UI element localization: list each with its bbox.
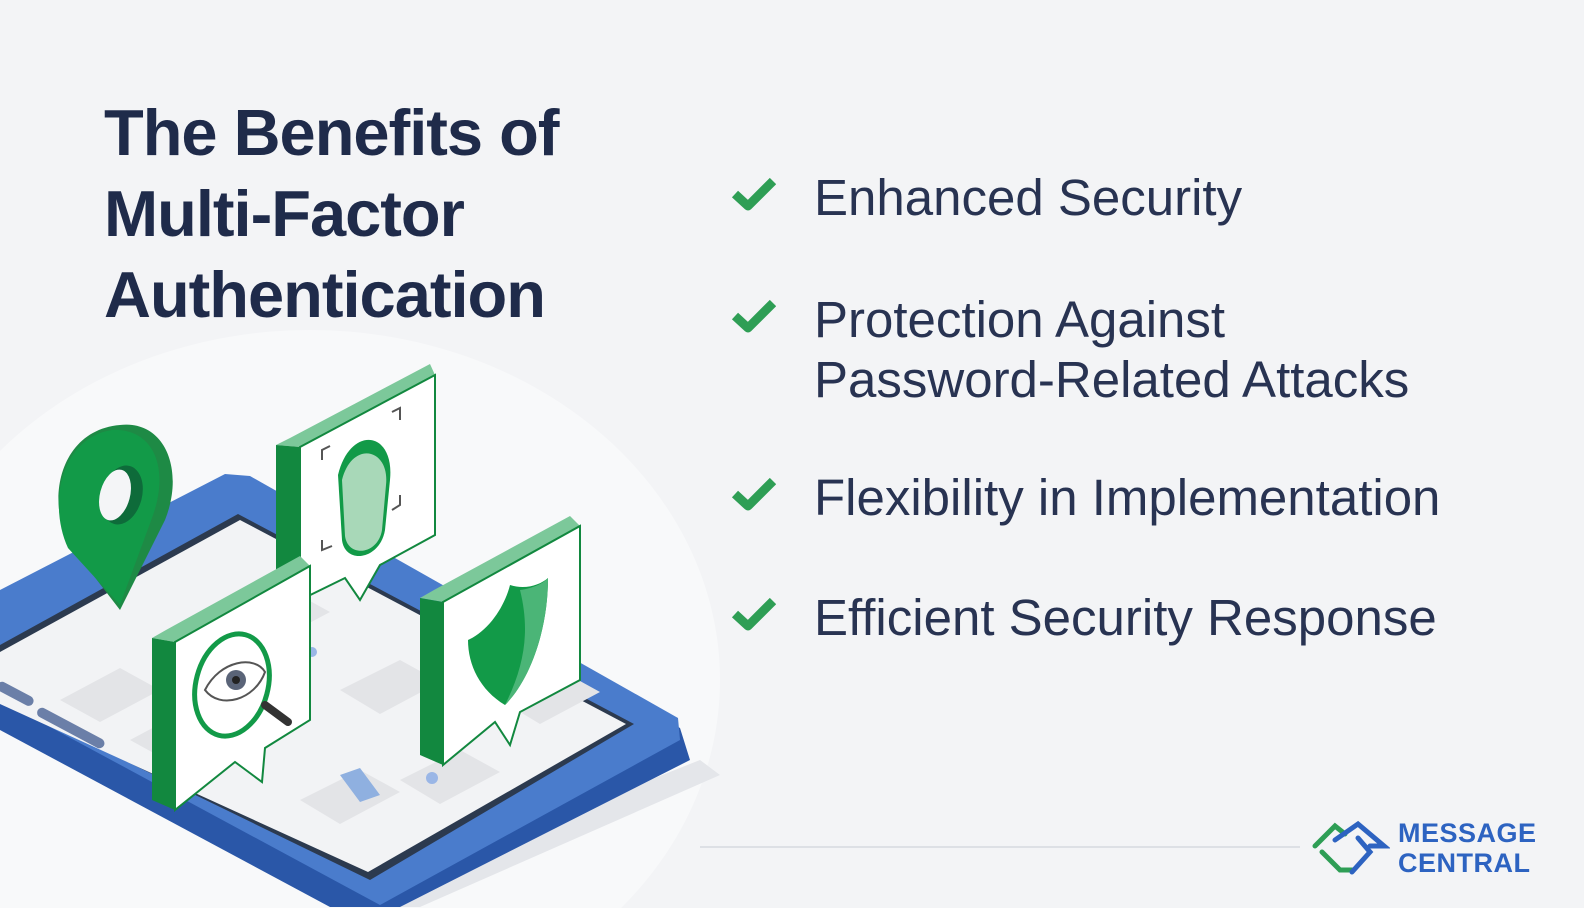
logo [1312,818,1537,878]
title: Authentication [104,258,545,331]
card: eye scan [152,556,310,810]
benefit: Protection: Password-Related Attacks [814,351,1409,408]
title [104,96,560,331]
divider line [700,846,1300,848]
card: face recognition [276,364,435,600]
benefit: Enhanced Security: Enhanced Security [814,169,1242,226]
phone shadow [330,760,720,907]
map blocks [60,590,600,824]
title: The Benefits of [104,96,558,169]
background glow [0,330,720,908]
logo text [1398,818,1537,878]
benefit: Protection [732,291,1409,408]
card: shield [420,516,580,765]
side buttons [0,680,35,708]
benefit: Flexibility: Flexibility in Implementation [814,469,1440,526]
illustration: phone with auth cards [0,364,720,907]
benefit: Efficient Response: Efficient Security Response [814,589,1437,646]
logo text: CENTRAL [1398,848,1530,878]
icon: logo mark [1312,820,1390,874]
phone body [0,474,690,907]
title: Multi-Factor [104,177,464,250]
logo text: MESSAGE [1398,818,1537,848]
benefit: Protection: Protection Against [814,291,1225,348]
icon: location pin [58,425,173,610]
